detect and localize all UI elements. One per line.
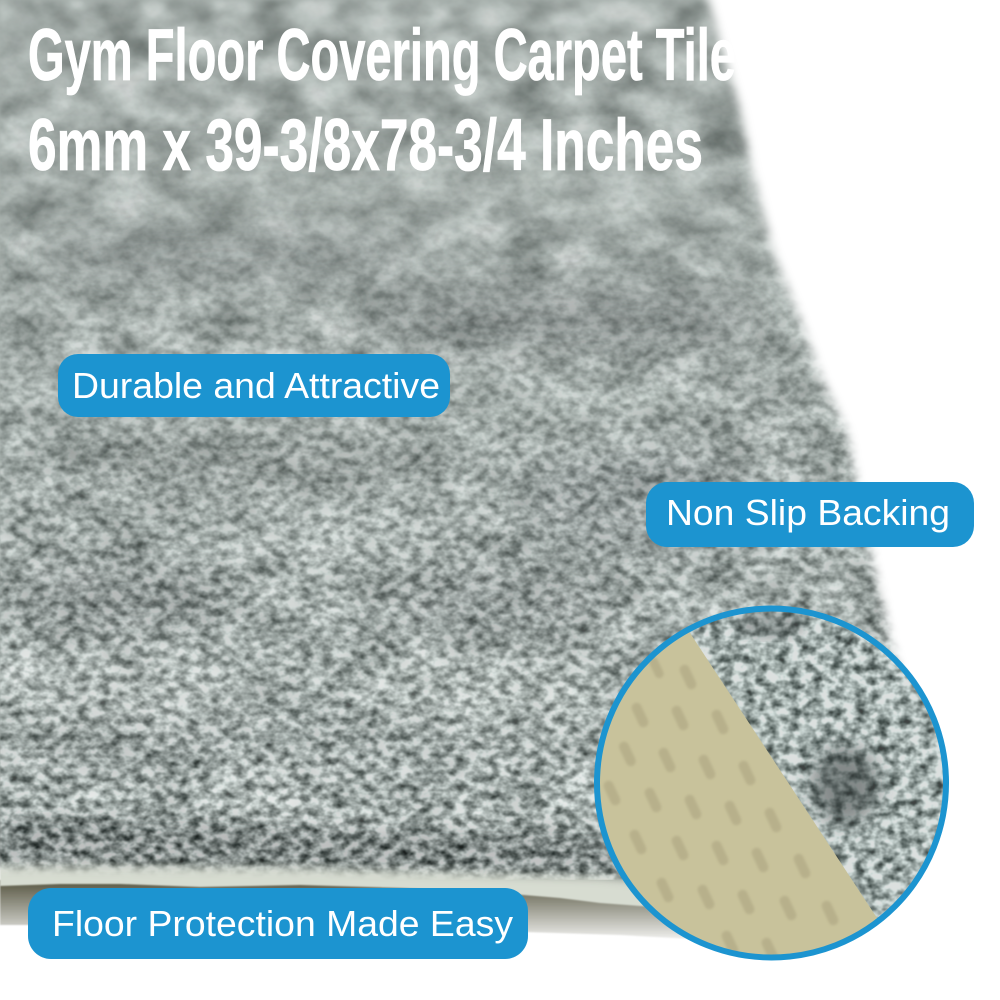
lens fibre side — [690, 612, 943, 918]
callout: floor protection: Floor Protection Made Easy — [52, 903, 513, 944]
fine fibre texture — [0, 46, 898, 880]
title — [28, 15, 736, 186]
mottled light and dark patches — [0, 0, 887, 833]
callout: durable and attractive: Durable and Attractive — [72, 365, 440, 406]
zoom lens: backing detail — [590, 600, 955, 970]
callout: non slip backing — [646, 482, 974, 547]
callout: floor protection — [28, 888, 528, 959]
lens backing studs — [602, 656, 840, 964]
title line 2: 6mm x 39-3/8x78-3/4 Inches — [28, 105, 703, 186]
callout: non slip backing: Non Slip Backing — [666, 492, 950, 533]
floor shadow — [0, 880, 800, 945]
lens ring — [597, 608, 946, 958]
callout: durable and attractive — [58, 354, 450, 417]
carpet backing edge — [0, 845, 890, 913]
lens cream backing — [600, 632, 877, 954]
dark band along the front edge — [0, 815, 800, 880]
